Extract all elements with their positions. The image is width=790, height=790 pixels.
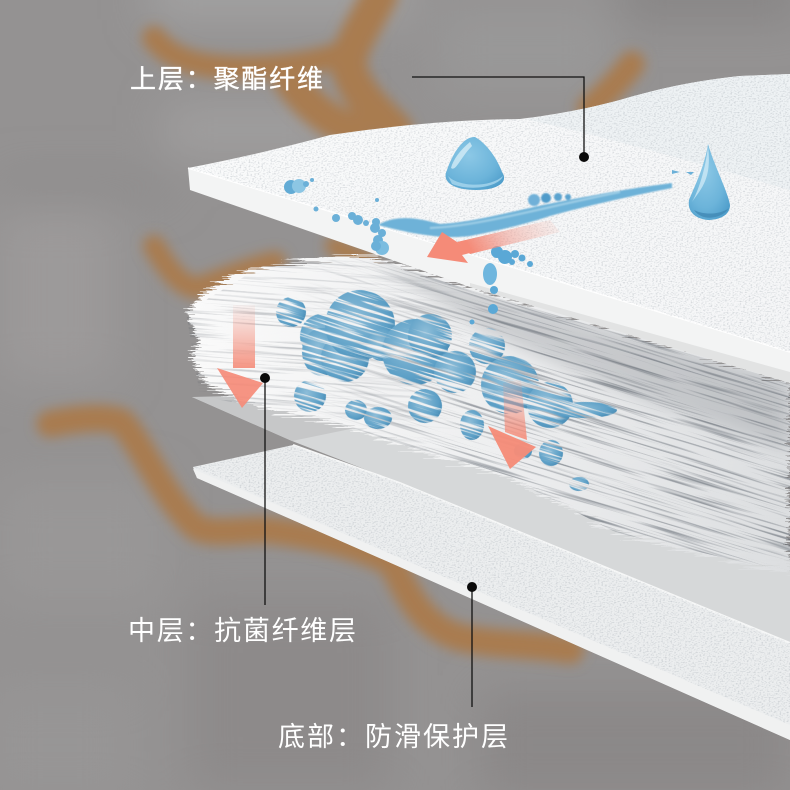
- water droplets in fibres: [220, 195, 673, 586]
- thin sheet under fibres: [192, 395, 790, 643]
- icon: droplets at right of arrow: [470, 246, 533, 324]
- leader line: middle layer: [260, 373, 270, 605]
- label: middle layer: 中层：抗菌纤维层: [128, 616, 356, 646]
- background orange branches: [50, 0, 632, 650]
- water stream on top sheet: [378, 183, 672, 237]
- fibre streak texture: [186, 256, 790, 571]
- icon: small droplets left: [284, 178, 389, 255]
- leader line: bottom layer: [467, 582, 477, 707]
- icon: tall water drop: [672, 144, 730, 220]
- top layer: polyester fibre sheet: [188, 70, 790, 383]
- label: bottom layer: 底部：防滑保护层: [278, 722, 508, 752]
- icon: dome water drop: [446, 137, 504, 190]
- arrow: right downward: [488, 380, 536, 469]
- arrow: left downward: [217, 305, 263, 408]
- bottom layer: anti-slip protection sheet: [190, 440, 790, 740]
- label: top layer: 上层：聚酯纤维: [130, 64, 323, 94]
- arrow: top sheet left pointing: [427, 220, 560, 263]
- sheet weave texture: [188, 70, 790, 360]
- middle layer: antibacterial fibres: [183, 254, 790, 571]
- leader line: top layer: [412, 77, 589, 162]
